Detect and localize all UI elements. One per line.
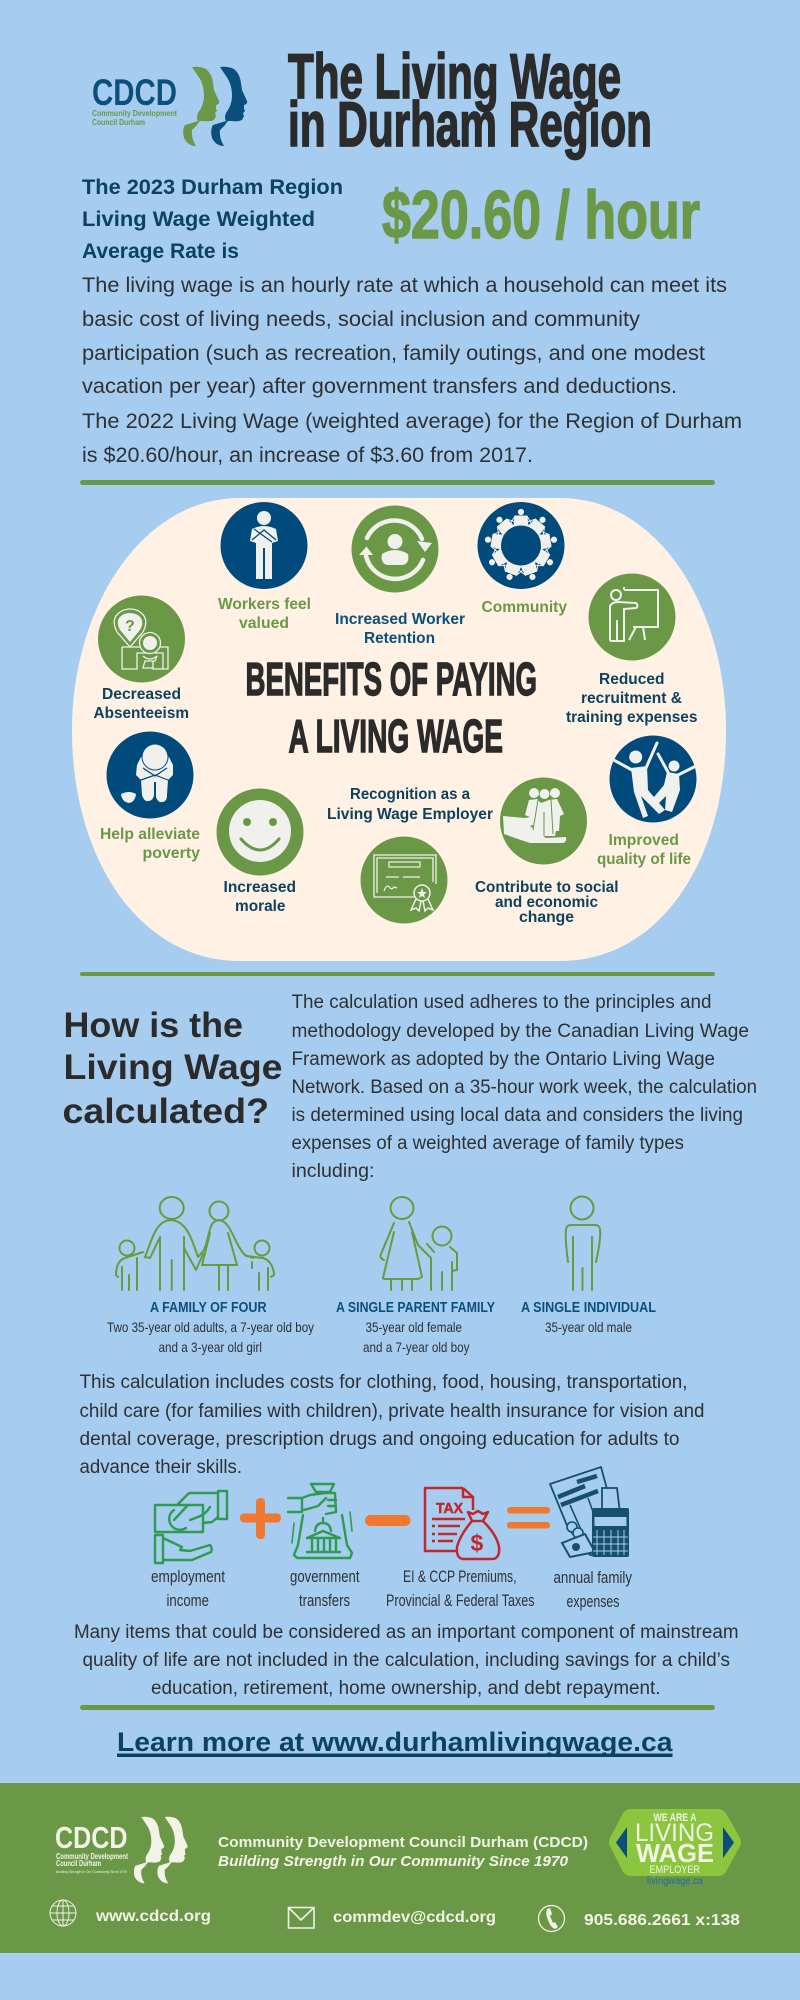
label: increased worker retention: Retention	[364, 630, 435, 647]
label: employment income: income	[166, 1591, 209, 1610]
icon: single parent family	[380, 1197, 457, 1290]
icon: taxes	[425, 1488, 499, 1559]
contact: website	[50, 1900, 211, 1926]
label: contribute to social and economic change: Contribute to social	[475, 879, 618, 896]
label: community: Community	[482, 599, 567, 616]
label: reduced recruitment and training expenses: Reduced	[599, 671, 664, 688]
calculation paragraph: Network. Based on a 35-hour work week, the calculation	[292, 1077, 757, 1098]
label: improved quality of life	[597, 832, 691, 868]
label: increased morale: Increased	[224, 879, 296, 896]
label: annual family expenses: expenses	[566, 1592, 620, 1611]
logo: footer CDCD	[55, 1817, 188, 1883]
text: organization name and tagline	[218, 1834, 588, 1870]
icon: taxes: $	[470, 1530, 484, 1556]
icon: annual family expenses	[550, 1467, 629, 1557]
text: organization name and tagline: Community Development Council Durham (CDCD)	[218, 1834, 588, 1851]
label: a single individual	[521, 1300, 656, 1335]
logo: CDCD: Council Durham	[92, 117, 145, 127]
panel: footer	[0, 1783, 800, 1953]
icon: single individual	[566, 1196, 600, 1290]
icon: equals	[507, 1507, 550, 1528]
badge: living wage employer	[609, 1809, 741, 1887]
exclusions paragraph: education, retirement, home ownership, and debt repayment.	[151, 1678, 660, 1699]
exclusions paragraph: Many items that could be considered as an important component of mainstream	[74, 1622, 738, 1643]
label: government transfers: government	[290, 1567, 360, 1586]
calculation paragraph: expenses of a weighted average of family types	[292, 1133, 684, 1154]
contact: email	[288, 1908, 496, 1928]
icon: decreased absenteeism	[98, 596, 185, 682]
icon: employment income	[155, 1491, 227, 1563]
label: a single parent family: 35-year old female	[366, 1319, 462, 1335]
icon: taxes: TAX	[436, 1500, 463, 1517]
text: organization name and tagline: Building Strength in Our Community Since 1970	[218, 1853, 569, 1870]
label: contribute to social and economic change: and economic	[495, 894, 598, 911]
logo: footer CDCD: Building Strength in Our Community Since 1970	[56, 1870, 127, 1874]
label: employment income: employment	[151, 1567, 225, 1586]
exclusions paragraph: quality of life are not included in the calculation, including savings for a child’s	[82, 1650, 730, 1671]
label: increased worker retention: Increased Worker	[335, 611, 465, 628]
label: workers feel valued	[218, 596, 311, 632]
contact: email: commdev@cdcd.org	[333, 1909, 496, 1926]
intro paragraph: vacation per year) after government transfers and deductions.	[82, 375, 677, 398]
learn more link: Learn more at www.durhamlivingwage.ca	[117, 1727, 674, 1757]
label: a single parent family	[336, 1300, 495, 1355]
title	[288, 42, 652, 160]
icon: reduced recruitment and training	[588, 574, 676, 660]
label: reduced recruitment and training expenses: training expenses	[566, 709, 698, 726]
badge: living wage employer: livingwage.ca	[647, 1876, 703, 1887]
label: increased morale	[224, 879, 296, 915]
label: a family of four: A FAMILY OF FOUR	[150, 1300, 267, 1316]
icon: family of four	[116, 1197, 274, 1290]
label: contribute to social and economic change	[475, 879, 618, 926]
label: a single parent family: A SINGLE PARENT FAMILY	[336, 1300, 495, 1316]
label: ei and ccp premiums and taxes	[386, 1567, 534, 1610]
label: improved quality of life: quality of life	[597, 851, 691, 868]
subtitle: rate description	[82, 176, 343, 263]
icon: certificate	[360, 836, 448, 924]
logo: footer CDCD: CDCD	[55, 1820, 128, 1855]
heading: how is the living wage calculated: How is the	[64, 1006, 243, 1045]
subtitle: rate description: Average Rate is	[82, 240, 239, 263]
logo: footer CDCD: Council Durham	[56, 1859, 101, 1868]
label: workers feel valued: Workers feel	[218, 596, 311, 613]
subtitle: rate description: Living Wage Weighted	[82, 208, 315, 231]
label: government transfers: transfers	[299, 1591, 350, 1610]
label: a family of four	[107, 1300, 314, 1355]
panel: benefits	[72, 498, 726, 961]
label: annual family expenses	[554, 1568, 632, 1611]
logo: footer CDCD: Community Development	[56, 1852, 128, 1861]
calculation paragraph: The calculation used adheres to the principles and	[292, 992, 712, 1013]
intro paragraph: basic cost of living needs, social inclusion and community	[82, 308, 641, 331]
label: a single individual: A SINGLE INDIVIDUAL	[521, 1300, 656, 1316]
icon: decreased absenteeism: ?	[125, 618, 135, 635]
label: workers feel valued: valued	[239, 615, 289, 632]
icon: improved quality of life	[610, 736, 696, 822]
icon: help alleviate poverty	[106, 732, 194, 818]
badge: living wage employer: EMPLOYER	[650, 1864, 700, 1876]
icon: increased morale	[216, 788, 304, 876]
heading: benefits	[246, 653, 537, 762]
icon: workers feel valued	[220, 502, 308, 589]
label: reduced recruitment and training expenses: recruitment &	[581, 690, 682, 707]
label: a family of four: and a 3-year old girl	[158, 1339, 262, 1355]
label: contribute to social and economic change: change	[519, 909, 574, 926]
icon: contribute to social change	[500, 778, 587, 864]
heading: benefits: A LIVING WAGE	[288, 710, 503, 762]
contact: phone	[538, 1906, 740, 1932]
costs paragraph	[80, 1372, 704, 1478]
label: decreased absenteeism	[94, 686, 189, 722]
label: recognition as employer: Living Wage Employer	[327, 806, 493, 823]
label: decreased absenteeism: Decreased	[102, 686, 181, 703]
label: improved quality of life: Improved	[608, 832, 679, 849]
calculation paragraph: is determined using local data and considers the living	[292, 1105, 743, 1126]
wage rate figure: $20.60 / hour	[382, 177, 700, 253]
label: decreased absenteeism: Absenteeism	[94, 705, 189, 722]
label: annual family expenses: annual family	[554, 1568, 632, 1587]
icon: minus	[365, 1515, 410, 1526]
icon: worker retention	[352, 506, 438, 592]
label: help alleviate poverty: poverty	[142, 845, 200, 862]
label: reduced recruitment and training expenses	[566, 671, 698, 726]
costs paragraph: advance their skills.	[80, 1457, 242, 1478]
heading: how is the living wage calculated	[62, 1006, 282, 1131]
icon: plus	[240, 1498, 281, 1539]
intro paragraph: is $20.60/hour, an increase of $3.60 from 2017.	[82, 444, 533, 467]
badge: living wage employer: WE ARE A	[654, 1812, 697, 1824]
subtitle: rate description: The 2023 Durham Region	[82, 176, 343, 199]
label: ei and ccp premiums and taxes: EI & CCP Premiums,	[403, 1567, 516, 1586]
intro paragraph: participation (such as recreation, family outings, and one modest	[82, 342, 705, 365]
title: The Living Wage	[288, 42, 621, 112]
intro paragraph	[82, 274, 742, 467]
icon: government transfers	[288, 1484, 352, 1558]
costs paragraph: This calculation includes costs for clothing, food, housing, transportation,	[80, 1372, 688, 1393]
heading: how is the living wage calculated: Living Wage	[64, 1048, 282, 1087]
label: increased worker retention	[335, 611, 465, 647]
logo: CDCD	[92, 67, 247, 146]
label: increased morale: morale	[235, 898, 286, 915]
label: a single individual: 35-year old male	[545, 1319, 632, 1335]
heading: how is the living wage calculated: calculated?	[62, 1092, 269, 1131]
badge: living wage employer: WAGE	[636, 1838, 714, 1868]
costs paragraph: dental coverage, prescription drugs and ongoing education for adults to	[80, 1429, 680, 1450]
label: help alleviate poverty	[100, 826, 200, 862]
label: help alleviate poverty: Help alleviate	[100, 826, 200, 843]
badge: living wage employer: LIVING	[635, 1819, 714, 1847]
icon: community	[478, 502, 564, 589]
label: a family of four: Two 35-year old adults, a 7-year old boy	[107, 1319, 314, 1335]
contact: website: www.cdcd.org	[95, 1908, 211, 1925]
label: a single parent family: and a 7-year old boy	[363, 1339, 470, 1355]
label: government transfers	[290, 1567, 360, 1610]
logo: CDCD: CDCD	[92, 72, 177, 113]
calculation paragraph	[292, 992, 757, 1182]
label: recognition as employer	[327, 786, 493, 823]
intro paragraph: The living wage is an hourly rate at which a household can meet its	[82, 274, 727, 297]
calculation paragraph: Framework as adopted by the Ontario Living Wage	[292, 1049, 715, 1070]
intro paragraph: The 2022 Living Wage (weighted average) for the Region of Durham	[82, 410, 742, 433]
contact: phone: 905.686.2661 x:138	[584, 1912, 740, 1929]
exclusions paragraph	[74, 1622, 738, 1699]
calculation paragraph: methodology developed by the Canadian Living Wage	[292, 1021, 749, 1042]
label: ei and ccp premiums and taxes: Provincial & Federal Taxes	[386, 1591, 534, 1610]
costs paragraph: child care (for families with children), private health insurance for vision and	[80, 1401, 704, 1422]
heading: benefits: BENEFITS OF PAYING	[246, 653, 537, 705]
label: recognition as employer: Recognition as a	[350, 786, 470, 803]
logo: CDCD: Community Development	[92, 108, 177, 118]
calculation paragraph: including:	[292, 1161, 374, 1182]
label: employment income	[151, 1567, 225, 1610]
